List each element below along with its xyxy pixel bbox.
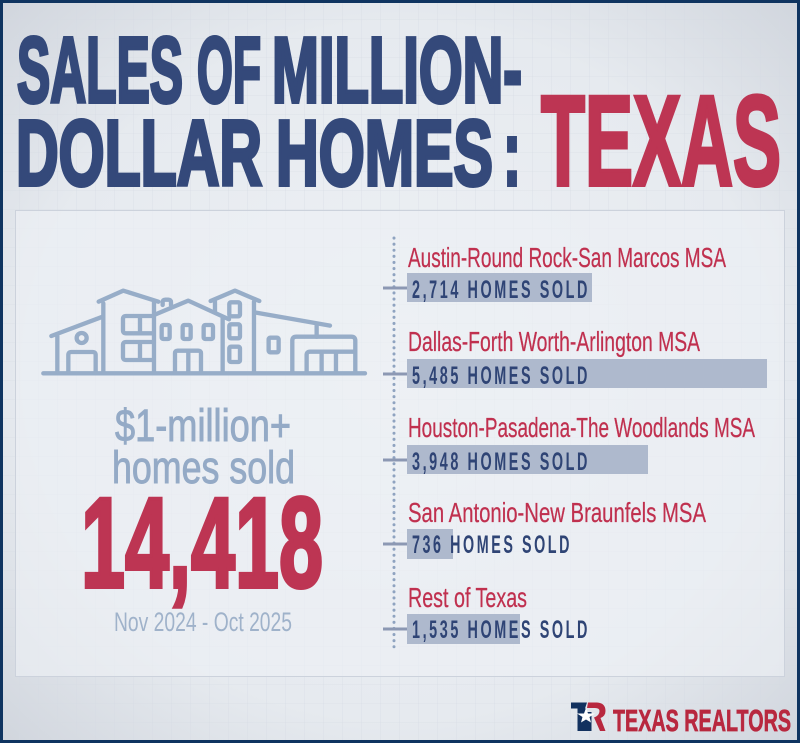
icon: row of houses bbox=[43, 291, 365, 373]
row: San Antonio: 736 HOMES SOLD bbox=[412, 531, 572, 559]
title: : bbox=[503, 101, 521, 205]
title: SALES bbox=[17, 18, 183, 122]
row: Dallas bbox=[383, 326, 767, 390]
row: Houston: 3,948 HOMES SOLD bbox=[412, 448, 590, 476]
text: $1-million+ homes sold: homes sold bbox=[112, 442, 295, 493]
row: Dallas: 5,485 HOMES SOLD bbox=[412, 362, 590, 390]
row: Houston bbox=[383, 412, 755, 476]
panel: content background bbox=[16, 210, 784, 676]
row: Rest of Texas: Rest of Texas bbox=[408, 582, 527, 613]
title: DOLLAR bbox=[16, 101, 262, 205]
row: Rest of Texas bbox=[383, 582, 590, 644]
title: HOMES bbox=[276, 101, 493, 205]
date range: Nov 2024 - Oct 2025 bbox=[114, 607, 292, 637]
row: San Antonio bbox=[383, 497, 706, 559]
total number: 14,418 bbox=[81, 472, 323, 615]
title bbox=[16, 18, 781, 213]
row: Austin bbox=[383, 242, 726, 304]
dotted axis bbox=[392, 238, 396, 652]
row: Rest of Texas: 1,535 HOMES SOLD bbox=[412, 616, 590, 644]
title: MILLION- bbox=[272, 18, 522, 122]
title: OF bbox=[197, 18, 261, 122]
text: $1-million+ homes sold bbox=[112, 400, 295, 493]
row: Austin: 2,714 HOMES SOLD bbox=[412, 276, 590, 304]
text: $1-million+ homes sold: $1-million+ bbox=[115, 400, 291, 451]
